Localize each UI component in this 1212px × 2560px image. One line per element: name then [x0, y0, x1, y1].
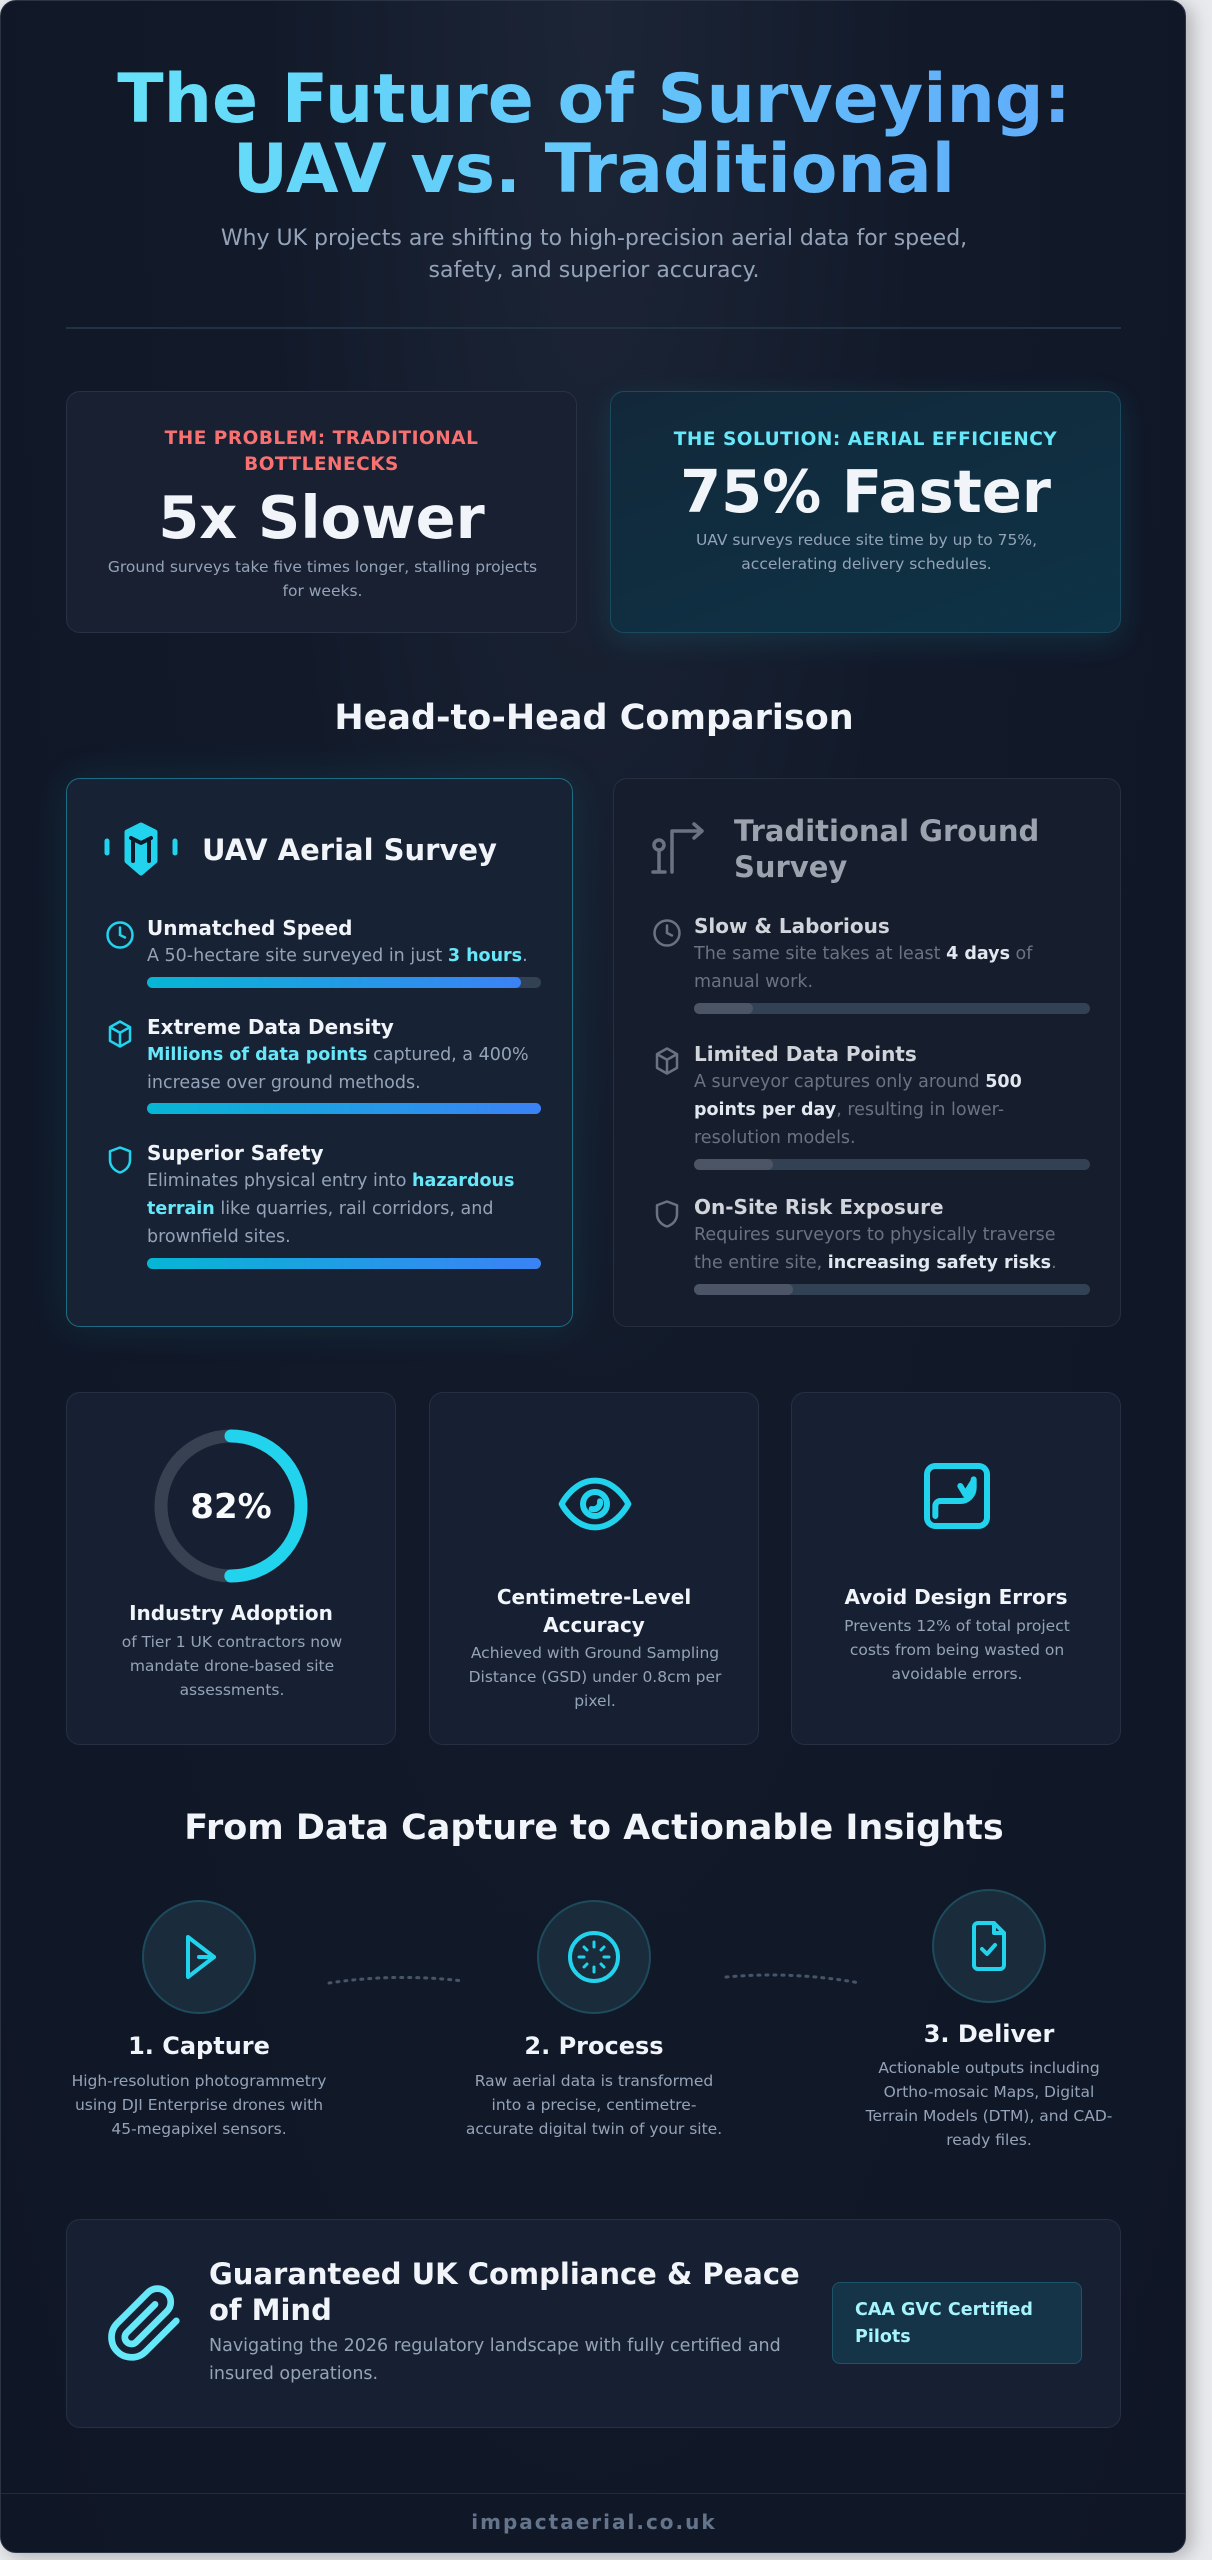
solution description: UAV surveys reduce site time by up to 75%, accelerating delivery schedules.	[696, 531, 1037, 573]
subtitle: Why UK projects are shifting to high-precision aerial data for speed,	[221, 226, 967, 251]
badge: CAA GVC: CAA GVC Certified Pilots	[855, 2300, 1033, 2347]
item: data density	[108, 1015, 541, 1114]
chart: 82% ring	[154, 1430, 308, 1582]
panel: traditional ground survey	[613, 778, 1121, 1327]
item: speed	[106, 916, 541, 988]
arrow: dotted connector 1	[328, 1976, 460, 1984]
item: slow: Slow & Laborious	[694, 914, 890, 938]
badge: CAA GVC	[832, 2282, 1082, 2364]
arrow: dotted connector 2	[724, 1974, 857, 1984]
title	[1, 65, 1187, 205]
title: UAV vs. Traditional	[233, 130, 955, 209]
card description: Achieved with Ground Sampling Distance (GSD) under 0.8cm per pixel.	[469, 1644, 721, 1710]
subtitle: safety, and superior accuracy.	[429, 258, 759, 283]
step title: 3. Deliver	[924, 2020, 1054, 2048]
panel: accuracy	[429, 1392, 759, 1745]
panel title: Survey	[734, 850, 847, 884]
chart: 82% ring: 82%	[190, 1487, 272, 1527]
solution stat value: 75% Faster	[680, 457, 1051, 526]
icon: process circle	[537, 1900, 651, 2014]
step description: Actionable outputs including Ortho-mosaic Maps, Digital Terrain Models (DTM), and CAD-ready files.	[866, 2059, 1112, 2149]
panel: compliance	[66, 2219, 1121, 2428]
icon: deliver circle	[932, 1889, 1046, 2003]
item: data density: Millions of data points captured, a 400% increase over ground methods.	[147, 1045, 529, 1093]
problem description: Ground surveys take five times longer, stalling projects for weeks.	[108, 558, 537, 600]
item: speed: Unmatched Speed	[147, 916, 352, 940]
panel: problem stat	[66, 391, 577, 633]
card title: Accuracy	[543, 1613, 645, 1637]
step description: Raw aerial data is transformed into a precise, centimetre-accurate digital twin of your site.	[466, 2072, 722, 2138]
compliance description: Navigating the 2026 regulatory landscape with fully certified and insured operations.	[209, 2336, 781, 2384]
subtitle	[221, 226, 967, 283]
panel: UAV aerial survey	[66, 778, 573, 1327]
item: data density: Extreme Data Density	[147, 1015, 394, 1039]
card title: Avoid Design Errors	[844, 1585, 1068, 1609]
card title: Centimetre-Level	[497, 1585, 691, 1609]
step title: 2. Process	[524, 2032, 664, 2060]
item: safety	[108, 1141, 541, 1269]
panel: design errors	[791, 1392, 1121, 1745]
icon: surveyor tripod	[651, 822, 704, 874]
icon: drone	[104, 822, 178, 876]
step: capture	[72, 1900, 326, 2138]
item: risk	[656, 1195, 1090, 1295]
compliance title: Guaranteed UK Compliance & Peace of Mind	[209, 2257, 800, 2327]
item: limited data	[656, 1042, 1090, 1170]
item: risk: On-Site Risk Exposure	[694, 1195, 944, 1219]
step title: 1. Capture	[128, 2032, 270, 2060]
problem label	[164, 428, 478, 475]
item: slow	[653, 914, 1090, 1014]
problem stat value: 5x Slower	[158, 483, 485, 552]
heading: workflow: From Data Capture to Actionable Insights	[184, 1808, 1004, 1848]
item: limited data: Limited Data Points	[694, 1042, 917, 1066]
panel title: UAV Aerial Survey	[202, 833, 497, 867]
item: risk: Requires surveyors to physically traverse the entire site, increasing safety risks.	[694, 1225, 1057, 1273]
panel: solution stat	[610, 391, 1121, 633]
panel title: Traditional Ground	[734, 814, 1039, 848]
card title	[497, 1585, 691, 1637]
step: process	[466, 1900, 722, 2138]
step: deliver	[866, 1889, 1112, 2149]
title: The Future of Surveying:	[117, 60, 1071, 139]
footer: impactaerial.co.uk	[471, 2510, 717, 2534]
item: safety: Eliminates physical entry into hazardous terrain like quarries, rail corridors, and brownfield sites.	[147, 1171, 514, 1247]
step description: High-resolution photogrammetry using DJI Enterprise drones with 45-megapixel sensors.	[72, 2072, 326, 2138]
heading: comparison: Head-to-Head Comparison	[334, 698, 854, 738]
card description: of Tier 1 UK contractors now mandate drone-based site assessments.	[122, 1633, 342, 1699]
problem label: BOTTLENECKS	[244, 454, 399, 475]
icon: capture circle	[142, 1900, 256, 2014]
icon: paperclip	[108, 2285, 180, 2361]
panel title	[734, 814, 1039, 884]
problem label: THE PROBLEM: TRADITIONAL	[165, 428, 478, 449]
card description: Prevents 12% of total project costs from being wasted on avoidable errors.	[844, 1617, 1070, 1683]
card title: Industry Adoption	[129, 1601, 333, 1625]
panel: industry adoption	[66, 1392, 396, 1745]
item: slow: The same site takes at least 4 days of manual work.	[694, 944, 1032, 992]
solution label: THE SOLUTION: AERIAL EFFICIENCY	[674, 429, 1057, 450]
item: speed: A 50-hectare site surveyed in just 3 hours.	[147, 946, 528, 966]
item: safety: Superior Safety	[147, 1141, 324, 1165]
icon: error chart	[924, 1463, 990, 1529]
icon: eye	[558, 1478, 632, 1530]
item: limited data: A surveyor captures only around 500 points per day, resulting in lower-resolution models.	[694, 1072, 1022, 1148]
